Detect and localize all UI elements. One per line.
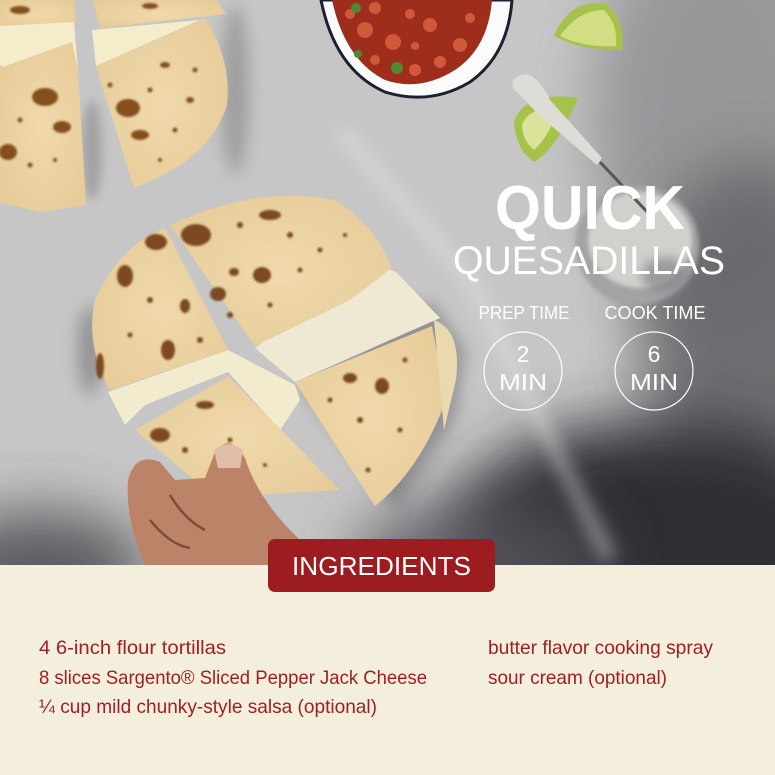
- prep time badge: 2: [517, 341, 529, 367]
- ingredients section background: [0, 565, 775, 775]
- cook time badge: MIN: [630, 369, 678, 395]
- ingredients list: left column: [39, 637, 427, 718]
- ingredients list: left column: 4 6-inch flour tortillas: [39, 637, 226, 659]
- ingredients list: right column: butter flavor cooking spray: [488, 637, 713, 659]
- lime wedges: [514, 3, 623, 162]
- ingredients heading: [268, 539, 495, 592]
- ingredients heading: INGREDIENTS: [292, 551, 471, 581]
- ingredients list: left column: 8 slices Sargento® Sliced Pepper Jack Cheese: [39, 667, 427, 689]
- ingredients list: left column: ¼ cup mild chunky-style salsa (optional): [39, 696, 377, 718]
- title: Quick Quesadillas: [453, 174, 725, 283]
- bowl of salsa: [321, 0, 512, 97]
- centre quesadilla: [78, 196, 465, 510]
- title: Quick Quesadillas: QUESADILLAS: [453, 239, 725, 283]
- cook time badge: 6: [648, 341, 660, 367]
- top-left quesadilla wedges: [0, 0, 249, 212]
- cook time badge: [604, 302, 706, 410]
- spoon and sour cream bowl: [513, 74, 699, 305]
- prep time badge: MIN: [499, 369, 547, 395]
- prep time badge: PREP TIME: [478, 302, 570, 323]
- ingredients list: right column: sour cream (optional): [488, 667, 667, 689]
- photo: quesadillas on marble: [0, 0, 775, 565]
- title: Quick Quesadillas: QUICK: [495, 174, 685, 243]
- cook time badge: COOK TIME: [604, 302, 706, 323]
- hand: [128, 443, 300, 565]
- ingredients list: right column: [488, 637, 713, 689]
- marble background: [0, 0, 775, 565]
- prep time badge: [478, 302, 570, 410]
